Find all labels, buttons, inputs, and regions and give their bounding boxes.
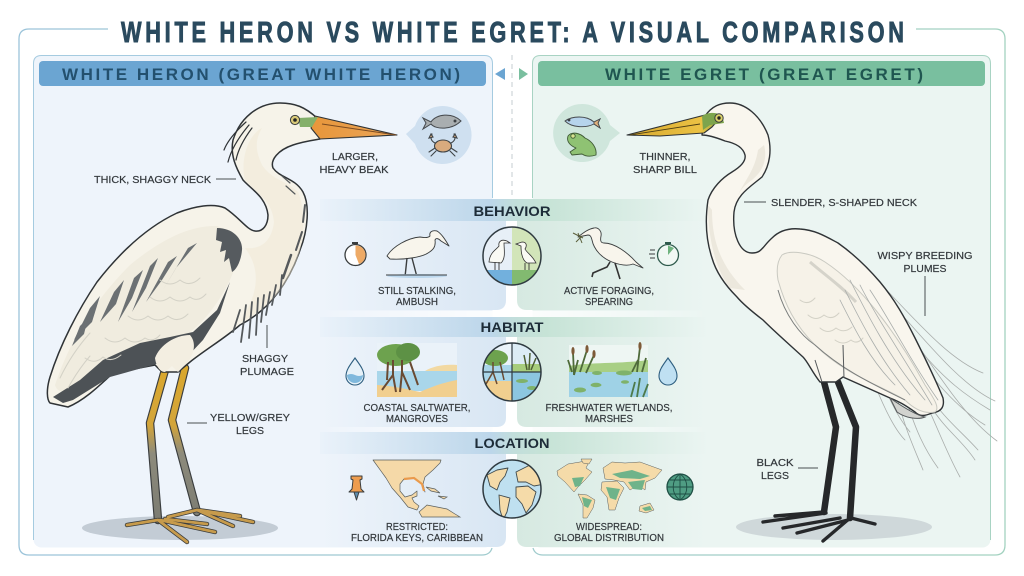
center dashed divider xyxy=(511,55,513,197)
ground shadow xyxy=(82,516,278,540)
label: larger heavy beak: HEAVY BEAK xyxy=(320,164,388,176)
map: florida and caribbean xyxy=(373,460,460,517)
icon: green globe xyxy=(667,474,693,500)
section: habitat xyxy=(335,317,678,427)
section: behavior xyxy=(335,199,680,310)
text: coastal xyxy=(364,402,470,425)
label: shaggy plumage xyxy=(240,325,294,378)
scene: mangrove coast xyxy=(377,343,457,397)
band: behavior heading: BEHAVIOR xyxy=(474,203,550,219)
icon: timer still xyxy=(345,242,366,266)
egret thigh line xyxy=(815,345,844,382)
heron neck shading xyxy=(240,128,303,322)
text: still stalking xyxy=(378,285,456,308)
icon: map pin xyxy=(349,476,364,500)
text: still stalking: STILL STALKING, xyxy=(378,285,456,297)
text: restricted xyxy=(351,521,483,544)
icon: behaviour split circle xyxy=(483,227,541,286)
heading: white egret xyxy=(538,61,985,86)
heron wing xyxy=(55,226,237,391)
egret beak xyxy=(627,113,724,136)
heron bird xyxy=(47,103,397,542)
heading: white heron: WHITE HERON (GREAT WHITE HERON) xyxy=(62,65,460,84)
icon: globe center xyxy=(483,460,545,520)
title: WHITE HERON VS WHITE EGRET: A VISUAL COMPARISON xyxy=(121,17,904,49)
heron shaggy fringe xyxy=(233,176,305,342)
icon: stalking heron xyxy=(386,231,449,278)
ground shadow xyxy=(736,514,932,540)
text: active foraging: ACTIVE FORAGING, xyxy=(564,285,654,297)
text: coastal: MANGROVES xyxy=(386,413,448,425)
label: wispy breeding plumes xyxy=(878,250,972,316)
band: behavior heading xyxy=(320,199,708,221)
egret plumes behind xyxy=(875,280,997,477)
heading: white heron xyxy=(39,61,486,86)
heron dark wing band xyxy=(53,282,230,403)
text: restricted: RESTRICTED: xyxy=(386,521,448,533)
heron dark shoulder xyxy=(216,228,242,272)
label: shaggy plumage: SHAGGY xyxy=(242,353,288,365)
label: yellow grey legs xyxy=(187,412,290,437)
label: thinner sharp bill: SHARP BILL xyxy=(633,164,697,176)
white center stem xyxy=(506,454,517,548)
icon: crab xyxy=(429,134,457,156)
icon: saltwater drop xyxy=(346,358,364,385)
icon: fish xyxy=(423,115,461,129)
icon: fish xyxy=(565,117,600,128)
egret body and neck xyxy=(702,103,943,416)
label: thinner sharp bill xyxy=(633,151,697,176)
heron thigh xyxy=(155,335,194,372)
section: location xyxy=(320,432,708,548)
label: black legs xyxy=(756,457,818,482)
sub-panel: active foraging xyxy=(517,221,706,310)
icon: timer fast xyxy=(649,242,678,266)
text: still stalking: AMBUSH xyxy=(396,296,438,308)
label: shaggy plumage: PLUMAGE xyxy=(240,366,294,378)
text: freshwater xyxy=(546,402,672,425)
band: habitat heading: HABITAT xyxy=(480,319,544,335)
label: slender s-shaped neck: SLENDER, S-SHAPED NECK xyxy=(771,197,917,209)
map: world distribution xyxy=(557,459,662,518)
arrow: compare left xyxy=(495,68,505,80)
scene: freshwater marsh xyxy=(568,342,648,397)
label: larger heavy beak xyxy=(320,151,388,176)
heron body and neck xyxy=(47,103,320,407)
heron head plumes xyxy=(224,122,252,162)
band: habitat heading xyxy=(320,317,708,337)
label: wispy breeding plumes: WISPY BREEDING xyxy=(878,250,972,262)
band: location heading xyxy=(320,432,708,454)
label: yellow grey legs: LEGS xyxy=(236,425,264,437)
heron beak xyxy=(290,115,397,139)
text: active foraging: SPEARING xyxy=(585,296,633,308)
sub-panel: still stalking xyxy=(320,221,506,310)
heading: white egret: WHITE EGRET (GREAT EGRET) xyxy=(605,65,923,84)
white center stem xyxy=(506,337,517,428)
white center stem xyxy=(506,221,517,311)
text: freshwater: MARSHES xyxy=(585,413,633,425)
sub-panel: coastal xyxy=(320,337,506,427)
icon: spearing egret xyxy=(573,228,643,279)
label: thick shaggy neck: THICK, SHAGGY NECK xyxy=(94,174,211,186)
section separators xyxy=(320,311,708,432)
sub-panel: widespread xyxy=(517,454,706,547)
label: wispy breeding plumes: PLUMES xyxy=(904,263,946,275)
arrow: compare right xyxy=(519,68,528,80)
text: widespread xyxy=(554,521,664,544)
text: active foraging xyxy=(564,285,654,308)
band: location heading: LOCATION xyxy=(474,435,550,451)
heron wing streaks xyxy=(72,243,197,346)
sub-panel: restricted xyxy=(320,454,506,547)
text: restricted: FLORIDA KEYS, CARIBBEAN xyxy=(351,532,483,544)
text: freshwater: FRESHWATER WETLANDS, xyxy=(546,402,672,414)
heron legs xyxy=(127,368,253,542)
label: larger heavy beak: LARGER, xyxy=(332,151,378,163)
callout: egret diet bubble xyxy=(553,104,620,162)
icon: frog xyxy=(568,133,596,156)
egret neck shading xyxy=(708,205,745,290)
panel: white egret xyxy=(532,56,990,548)
label: yellow grey legs: YELLOW/GREY xyxy=(210,412,290,424)
text: widespread: WIDESPREAD: xyxy=(576,521,642,533)
icon: freshwater drop xyxy=(659,358,677,385)
icon: habitat quartered circle xyxy=(482,343,541,401)
label: thinner sharp bill: THINNER, xyxy=(640,151,690,163)
text: widespread: GLOBAL DISTRIBUTION xyxy=(554,532,664,544)
label: black legs: LEGS xyxy=(761,470,789,482)
sub-panel: freshwater xyxy=(517,337,706,427)
egret legs xyxy=(763,382,875,541)
callout: heron diet bubble xyxy=(406,106,472,164)
label: black legs: BLACK xyxy=(756,457,794,469)
text: coastal: COASTAL SALTWATER, xyxy=(364,402,470,414)
panel: white heron xyxy=(34,56,492,548)
egret bird xyxy=(627,103,997,541)
egret wing xyxy=(777,252,938,418)
